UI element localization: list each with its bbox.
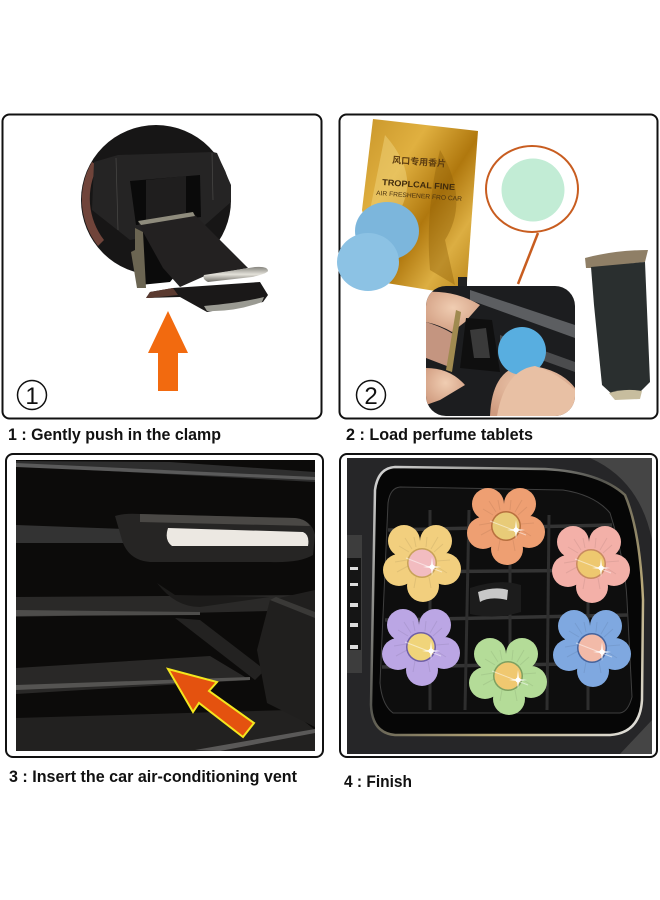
fragrance sachet: AIR FRESHENER FRO CAR — [376, 190, 462, 203]
photo: clip arm — [131, 212, 268, 312]
clip side view — [585, 250, 650, 400]
fragrance sachet: 风口专用香片 — [392, 154, 447, 169]
fragrance sachet — [362, 119, 478, 296]
flower: green — [469, 638, 547, 715]
step number 1: 1 — [25, 383, 39, 410]
caption 4: 4 : Finish — [344, 773, 412, 791]
caption 2: 2 : Load perfume tablets — [346, 426, 533, 444]
flower: blue — [553, 610, 631, 687]
panel 2: load perfume tablets — [337, 114, 658, 418]
flower: pink — [552, 526, 630, 603]
blue tablets — [337, 202, 419, 291]
photo: vent close-up — [16, 460, 315, 751]
clip body with chrome bar — [115, 514, 315, 562]
flower: purple — [382, 609, 460, 686]
caption 1: 1 : Gently push in the clamp — [8, 426, 221, 444]
inset photo: loading tablet — [426, 286, 575, 416]
arrow: insert direction — [168, 669, 254, 737]
flower: orange — [467, 488, 545, 565]
panel 1: push in the clamp — [2, 114, 322, 418]
panel 3: insert into vent — [6, 454, 323, 757]
flower: yellow — [383, 525, 461, 602]
step number 2: 2 — [364, 383, 378, 410]
callout circle: green tablet — [486, 146, 578, 284]
photo: car air vent — [347, 458, 652, 754]
step number 2 — [356, 380, 386, 410]
caption 3: 3 : Insert the car air-conditioning vent — [9, 768, 297, 786]
fragrance sachet: TROPLCAL FINE — [382, 177, 456, 192]
arrow: push up — [148, 311, 188, 391]
photo: clip back disc — [81, 125, 231, 275]
step number 1 — [18, 380, 46, 410]
panel 4: finished vent with flowers — [340, 454, 657, 757]
